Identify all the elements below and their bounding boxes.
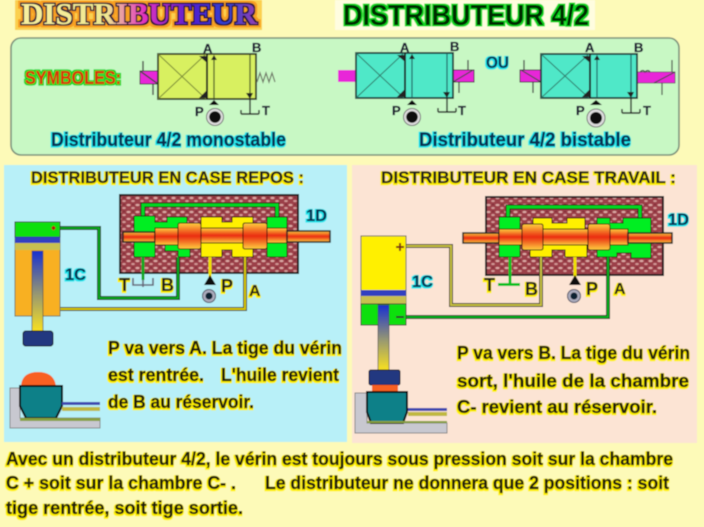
port labels travail: P — [586, 279, 598, 299]
pump P — [568, 275, 581, 302]
text: repos: L'huile revient — [221, 365, 339, 385]
symbol: tank T — [498, 283, 520, 286]
valve 1D travail — [463, 197, 672, 275]
symbol: distributeur monostable: B — [252, 40, 261, 55]
symbol: distributeur bistable 2: B — [634, 40, 643, 55]
port labels: A — [585, 40, 595, 55]
symbol: distributeur bistable 1: B — [450, 39, 459, 54]
symbol: distributeur bistable 1: T — [458, 103, 466, 118]
caption: monostable: Distributeur 4/2 monostable — [51, 130, 286, 151]
cylinder 1C repos — [15, 222, 60, 346]
label: 1D: 1D — [306, 206, 327, 225]
symbol: distributeur bistable 2 — [520, 40, 675, 127]
port labels travail: B — [525, 279, 538, 299]
text: repos: est rentrée. — [108, 365, 204, 385]
spool — [463, 233, 499, 243]
text: travail — [457, 343, 690, 417]
channel — [508, 207, 640, 218]
panel: case travail — [352, 165, 697, 443]
caption: bistable: Distributeur 4/2 bistable — [419, 130, 631, 151]
spool — [123, 232, 155, 242]
pipes repos — [50, 228, 245, 309]
panel: symboles — [11, 38, 679, 155]
green chambers — [134, 216, 190, 257]
label: 1D: 1D — [668, 210, 689, 229]
yellow chamber — [530, 218, 587, 257]
port labels repos: B — [161, 275, 174, 295]
symbol: distributeur monostable — [140, 40, 275, 126]
label: 1C: 1C — [412, 272, 433, 291]
text: travail: sort, l'huile de la chambre — [457, 371, 689, 391]
text block: conclusion: C + soit sur la chambre C- . — [6, 473, 236, 493]
label: OU: OU — [486, 53, 509, 72]
pump P — [202, 275, 216, 302]
port labels repos: A — [249, 283, 261, 300]
title: DISTRIBUTEUR 4/2: DISTRIBUTEUR 4/2 — [343, 0, 589, 32]
workpiece repos — [10, 372, 100, 428]
valve 1D repos — [120, 195, 330, 273]
symbol: distributeur monostable: P — [195, 104, 204, 119]
text: repos — [108, 338, 342, 412]
text: travail: P va vers B. La tige du vérin — [457, 343, 690, 363]
heading: case travail: DISTRIBUTEUR EN CASE TRAVAIL : — [381, 168, 676, 187]
label: 1C: 1C — [65, 265, 86, 284]
port labels travail — [484, 275, 626, 299]
port labels: A — [203, 41, 213, 56]
text: repos: P va vers A. La tige du vérin — [108, 338, 342, 358]
port labels travail: A — [614, 281, 626, 298]
symbol: distributeur bistable 1 — [338, 39, 474, 126]
text block: conclusion: tige rentrée, soit tige sortie. — [6, 498, 243, 518]
text block: conclusion — [6, 449, 673, 518]
port labels travail: T — [484, 275, 495, 295]
symbol: tank T — [133, 278, 153, 287]
port labels repos: T — [119, 275, 130, 295]
text: travail: C- revient au réservoir. — [457, 397, 657, 417]
cylinder 1C travail — [361, 236, 406, 385]
green chambers — [499, 217, 520, 257]
panel: case repos — [4, 165, 347, 442]
port labels repos — [119, 275, 261, 300]
heading: case repos: DISTRIBUTEUR EN CASE REPOS : — [31, 168, 304, 187]
port labels: A — [400, 40, 410, 55]
channel — [143, 205, 277, 218]
label: SYMBOLES: SYMBOLES: — [25, 68, 121, 88]
symbol: distributeur bistable 2: T — [643, 103, 651, 118]
port labels repos: P — [221, 276, 233, 296]
pipes travail — [405, 246, 608, 317]
workpiece travail — [355, 385, 447, 433]
yellow chamber — [201, 217, 253, 257]
text block: conclusion: Le distributeur ne donnera que 2 positions : soit — [265, 473, 669, 493]
symbol: distributeur bistable 2: P — [576, 103, 585, 118]
text block: conclusion: Avec un distributeur 4/2, le vérin est toujours sous pression soit sur la chambre — [6, 449, 673, 469]
symbol: distributeur monostable: T — [262, 103, 270, 118]
symbol: distributeur bistable 1: P — [392, 103, 401, 118]
text: repos: de B au réservoir. — [108, 392, 254, 412]
